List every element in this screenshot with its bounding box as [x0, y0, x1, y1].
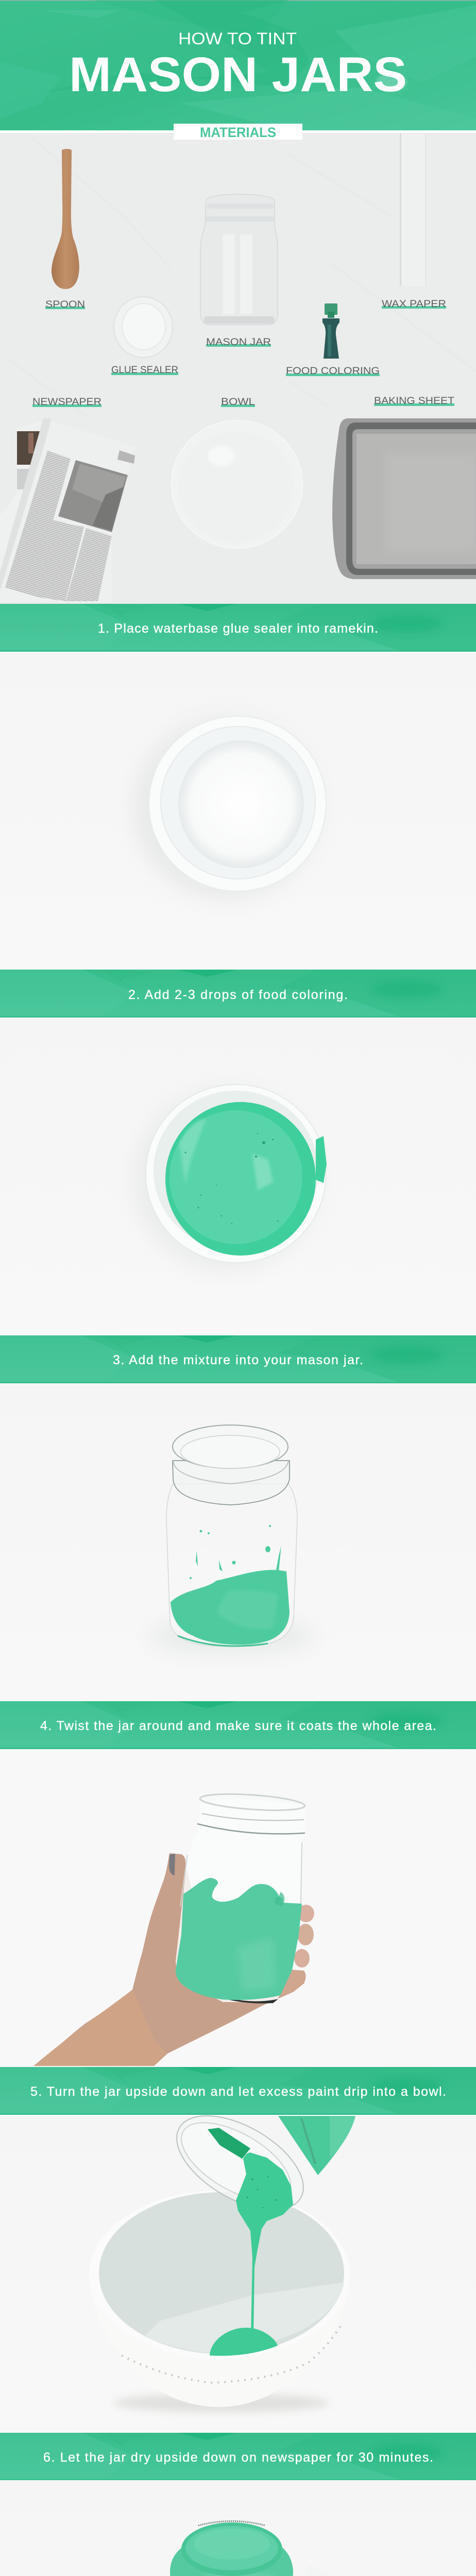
section: step 1 — [0, 604, 476, 921]
label: spoon: SPOON — [45, 299, 85, 310]
bowl — [89, 2191, 350, 2407]
section: step 4 — [0, 1701, 476, 2066]
step 3 banner: 3. Add the mixture into your mason jar. — [113, 1353, 363, 1367]
step 4 banner: 4. Twist the jar around and make sure it coats the whole area. — [40, 1719, 436, 1733]
step 4 banner — [0, 1701, 476, 1749]
newspaper — [26, 2564, 431, 2576]
materials heading tab — [174, 124, 302, 140]
step 3 banner — [0, 1335, 476, 1383]
step 1 banner: 1. Place waterbase glue sealer into ramekin. — [98, 621, 378, 636]
heading: mason jars: MASON JARS — [69, 47, 407, 102]
icon: glue sealer ramekin — [114, 297, 173, 358]
photo: paint dripping into bowl — [0, 2096, 476, 2433]
materials heading tab: MATERIALS — [200, 125, 276, 140]
label: glue sealer: GLUE SEALER — [111, 365, 178, 376]
icon: bowl — [172, 420, 302, 548]
icon: wax paper — [400, 133, 426, 286]
section: step 3 — [0, 1335, 476, 1672]
step 5 banner: 5. Turn the jar upside down and let excess paint drip into a bowl. — [30, 2084, 446, 2099]
photo: hand twisting the jar — [0, 1749, 476, 2067]
pouring jar — [161, 2096, 355, 2337]
section: step 6 — [0, 2433, 476, 2576]
step 1 banner — [0, 604, 476, 652]
header banner — [0, 0, 476, 130]
label: newspaper: NEWSPAPER — [32, 397, 101, 408]
heading: how to tint: HOW TO TINT — [178, 29, 297, 48]
label: bowl: BOWL — [221, 397, 255, 408]
label: food coloring: FOOD COLORING — [286, 366, 380, 377]
section: header and materials — [0, 0, 476, 604]
green jar — [170, 2521, 293, 2576]
icon: spoon — [52, 149, 79, 289]
step 6 banner — [0, 2433, 476, 2481]
label: mason jar: MASON JAR — [206, 337, 271, 348]
hand — [33, 1853, 314, 2066]
icon: newspaper — [0, 418, 135, 603]
icon: baking sheet — [332, 418, 476, 579]
label: baking sheet: BAKING SHEET — [374, 396, 454, 406]
clear jar — [176, 1791, 305, 2004]
step 2 banner — [0, 970, 476, 1018]
label: wax paper: WAX PAPER — [382, 299, 446, 310]
step 2 banner: 2. Add 2-3 drops of food coloring. — [128, 988, 348, 1002]
photo: jar with paint at the bottom — [0, 1383, 476, 1701]
icon: food coloring bottle — [322, 303, 339, 359]
photo: ramekin with green paint — [0, 1018, 476, 1335]
photo: jar drying on newspaper — [0, 2480, 476, 2576]
step 6 banner: 6. Let the jar dry upside down on newspaper for 30 minutes. — [43, 2450, 433, 2465]
section: step 5 — [0, 2067, 476, 2419]
panel: materials — [0, 133, 476, 604]
paint in jar — [176, 1878, 302, 2000]
icon: mason jar — [200, 194, 278, 325]
step 5 banner — [0, 2067, 476, 2115]
section: step 2 — [0, 970, 476, 1289]
photo: ramekin with glue sealer — [0, 653, 476, 970]
